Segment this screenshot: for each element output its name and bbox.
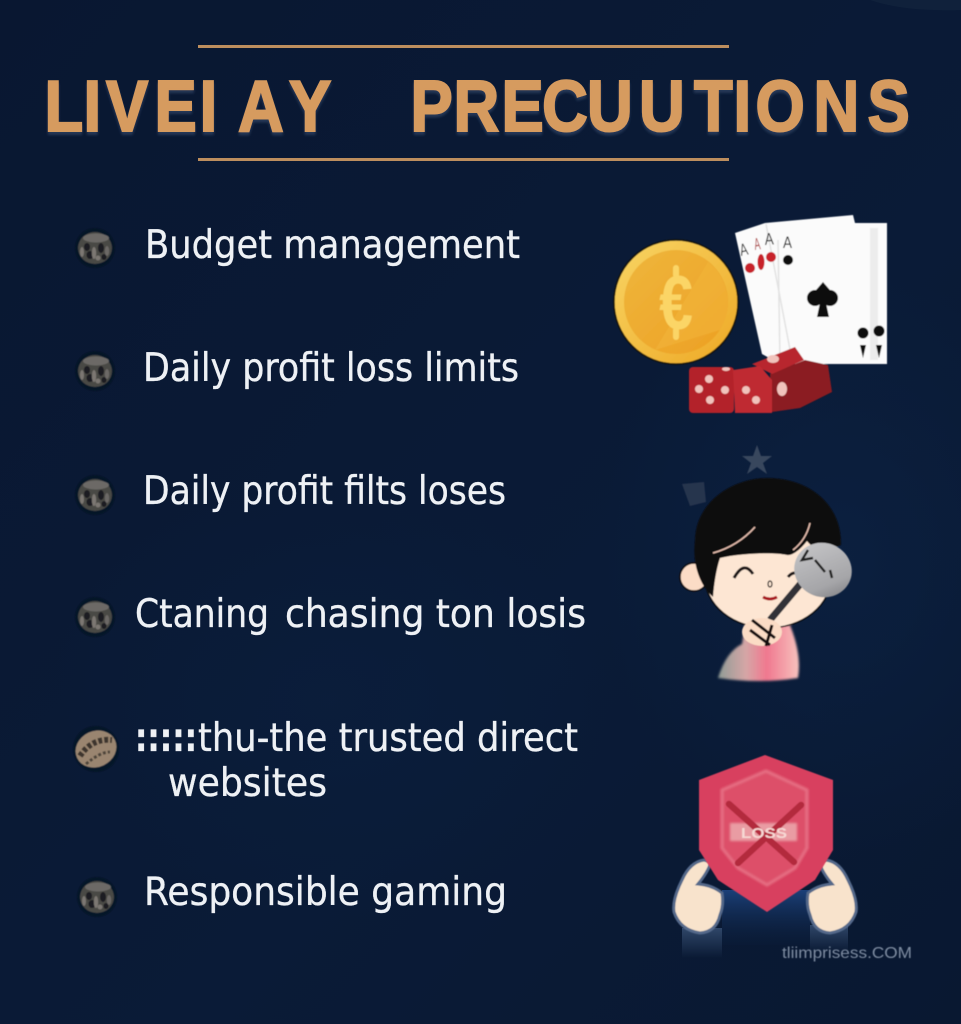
shield: LOSS (741, 825, 787, 842)
title block (45, 45, 910, 161)
item: budget management: Budget management (145, 223, 520, 268)
item: daily profit loss limits: Daily profit loss limits (143, 346, 519, 391)
item: daily profit filts loses: Daily profit filts loses (143, 469, 506, 514)
icon: tan bullet (69, 724, 123, 774)
cross mark (729, 804, 801, 863)
icon: playing cards: A (738, 240, 750, 260)
item: responsible gaming: Responsible gaming (144, 870, 507, 915)
icon: gold coin: € (659, 261, 693, 346)
censored label (730, 823, 797, 841)
icon: playing cards (735, 215, 887, 364)
item: ctaning chasing ton losis (75, 592, 586, 637)
character body (718, 625, 799, 681)
icon: playing cards: A (783, 233, 793, 252)
item: ctaning chasing ton losis: chasing ton losis (285, 592, 586, 637)
character ear (680, 563, 708, 591)
icon: red dice (689, 347, 832, 413)
icon: gold coin (614, 240, 738, 364)
title top rule (198, 45, 729, 48)
eyes, nose and mouth (734, 568, 797, 599)
title text: PRECUUTIONS (411, 67, 910, 147)
spade pips (783, 255, 884, 358)
icon: playing cards: A (764, 229, 775, 249)
icon: stars (682, 445, 772, 506)
item: trusted direct websites: thu-the trusted direct (198, 716, 578, 761)
item: trusted direct websites (69, 716, 578, 806)
hands (674, 860, 856, 933)
icon: playing cards: A (753, 234, 762, 254)
torso (722, 890, 810, 945)
illustration: coin, cards and dice (614, 215, 887, 413)
watermark: tliimprisess.COM (782, 945, 912, 962)
title bottom rule (198, 158, 729, 161)
item: trusted direct websites: ::::: (135, 716, 197, 761)
magnifier handle (770, 582, 802, 620)
sleeves (682, 925, 848, 958)
character hand (742, 618, 782, 646)
hair highlights (713, 527, 755, 553)
shield (699, 755, 833, 912)
illustration: character with magnifier (680, 445, 859, 681)
character hair (694, 478, 841, 597)
magnifier head (787, 535, 859, 605)
character face (705, 526, 831, 628)
title text (45, 67, 910, 147)
checklist (69, 223, 586, 917)
illustration: hands holding a shield (674, 755, 912, 962)
item: ctaning chasing ton losis: Ctaning (135, 592, 269, 637)
title text: LIVEI AY (45, 67, 331, 147)
item: trusted direct websites: websites (168, 761, 327, 806)
